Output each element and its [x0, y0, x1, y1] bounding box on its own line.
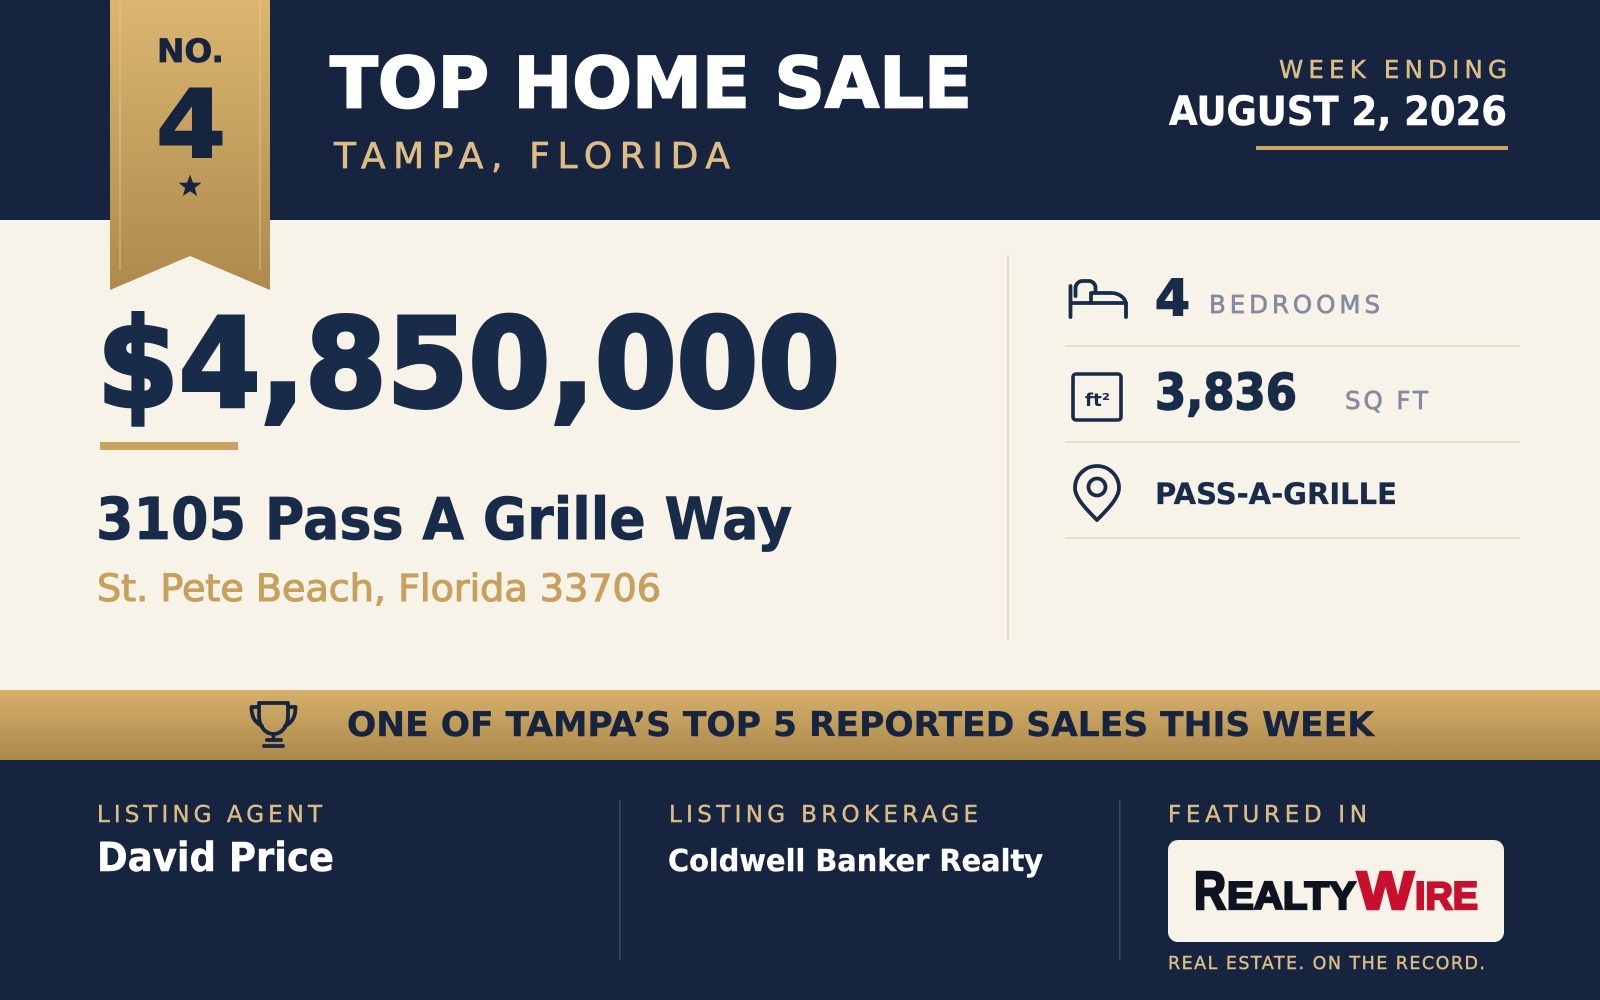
footer panel — [0, 760, 1600, 1000]
logo card: IRE — [1415, 875, 1478, 918]
rank number: 4 — [156, 71, 226, 180]
callout text: ONE OF TAMPA’S TOP 5 REPORTED SALES THIS WEEK — [347, 705, 1376, 745]
price underline — [100, 442, 238, 450]
logo card: EALTY — [1227, 875, 1356, 918]
bedrooms label: BEDROOMS — [1209, 290, 1380, 319]
city state zip: St. Pete Beach, Florida 33706 — [97, 567, 661, 610]
row: square feet — [1073, 364, 1429, 422]
neighborhood name: PASS-A-GRILLE — [1155, 477, 1397, 511]
week ending date: AUGUST 2, 2026 — [1169, 89, 1507, 135]
icon: star — [178, 174, 202, 196]
logo card — [1168, 840, 1504, 942]
icon: bed — [1070, 281, 1126, 317]
square footage value: 3,836 — [1155, 364, 1297, 422]
icon: map pin — [1075, 466, 1119, 520]
rank label: NO. — [157, 32, 224, 70]
rank ribbon — [110, 0, 270, 290]
subtitle: location: TAMPA, FLORIDA — [333, 136, 730, 177]
row: neighborhood — [1075, 466, 1397, 520]
listing brokerage — [668, 802, 1043, 879]
tagline: REAL ESTATE. ON THE RECORD. — [1168, 954, 1485, 974]
gold callout band — [0, 690, 1600, 760]
featured in — [1168, 802, 1504, 974]
row: bedrooms — [1070, 269, 1380, 327]
icon: square feet: ft² — [1085, 390, 1110, 411]
featured in: FEATURED IN — [1168, 802, 1367, 828]
bedroom count: 4 — [1155, 269, 1190, 327]
icon: square feet — [1073, 374, 1121, 420]
listing brokerage: Coldwell Banker Realty — [668, 844, 1043, 879]
main content panel — [0, 220, 1600, 690]
logo card: W — [1357, 861, 1414, 921]
vertical divider — [1007, 255, 1009, 640]
street address: 3105 Pass A Grille Way — [96, 485, 792, 553]
header panel — [0, 0, 1600, 220]
week ending label: WEEK ENDING — [1279, 55, 1507, 84]
listing agent: David Price — [97, 835, 334, 881]
listing agent — [97, 802, 334, 881]
icon: trophy — [252, 703, 296, 746]
title: TOP HOME SALE — [330, 42, 972, 124]
sale price: $4,850,000 — [97, 294, 840, 436]
listing agent: LISTING AGENT — [97, 802, 323, 828]
listing brokerage: LISTING BROKERAGE — [669, 802, 978, 828]
date underline — [1256, 146, 1508, 150]
square feet label: SQ FT — [1345, 386, 1429, 415]
logo card: R — [1194, 861, 1226, 921]
